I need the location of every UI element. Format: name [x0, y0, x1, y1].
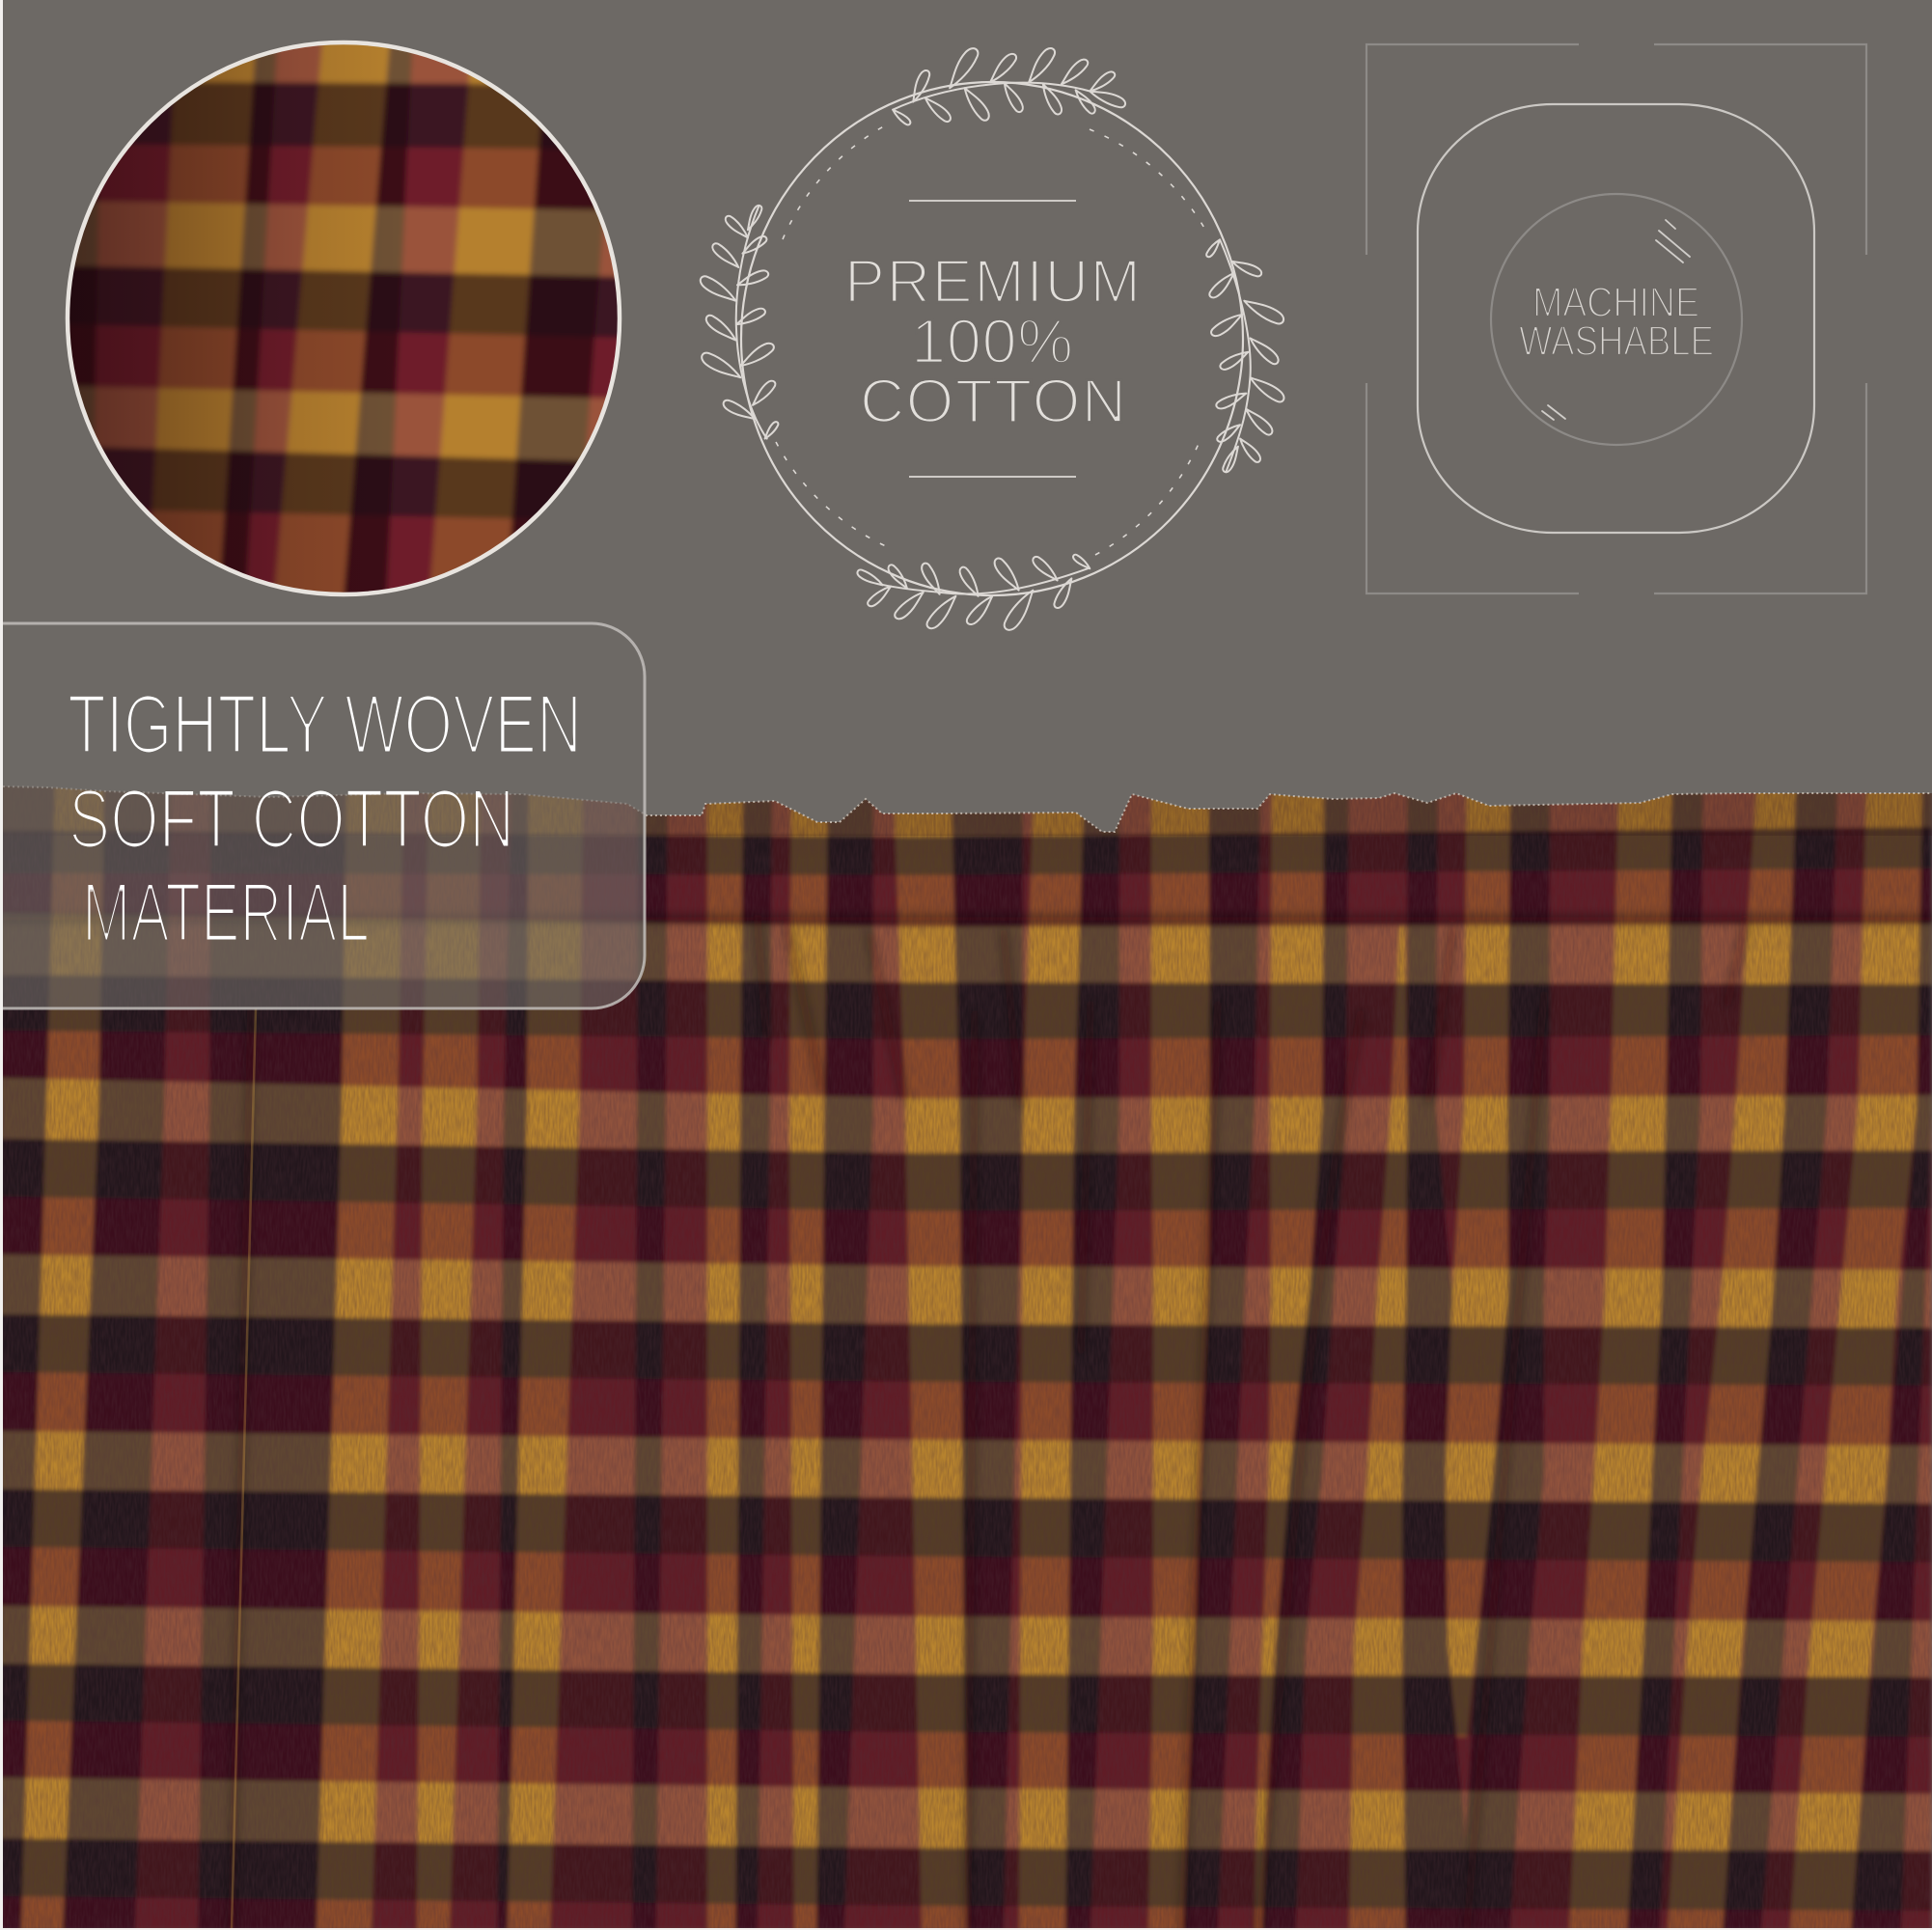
badge text: PREMIUM: [844, 248, 1141, 316]
corner brackets: [1366, 44, 1866, 593]
fabric close-up swatch: [58, 19, 627, 618]
right branch: [1205, 238, 1286, 474]
machine washable icon: [1366, 44, 1866, 593]
inner circle: [1491, 194, 1742, 445]
badge divider bottom: [909, 476, 1076, 478]
left branch: [698, 204, 780, 440]
machine washable text: [1519, 279, 1714, 365]
premium cotton badge: [698, 45, 1286, 633]
rounded frame: [1418, 104, 1814, 533]
badge text: [844, 248, 1141, 436]
callout text: TIGHTLY WOVEN: [68, 678, 582, 771]
curtain fabric plaid: [0, 762, 1932, 1930]
wreath branches: [698, 45, 1286, 633]
callout text: SOFT COTTON: [69, 773, 514, 866]
shine marks: [1542, 220, 1690, 420]
callout text: MATERIAL: [82, 867, 370, 959]
badge divider top: [909, 200, 1076, 202]
badge text: 100%: [911, 306, 1073, 376]
machine washable text: MACHINE: [1532, 279, 1699, 326]
fabric top edge stitching: [3, 786, 1932, 832]
top branch: [891, 45, 1127, 126]
panel: tightly woven callout: [3, 623, 645, 1008]
badge text: COTTON: [860, 367, 1126, 436]
bottom branch: [856, 553, 1091, 633]
badge ring: [741, 82, 1243, 595]
machine washable text: WASHABLE: [1519, 317, 1714, 365]
callout text: [68, 678, 582, 959]
